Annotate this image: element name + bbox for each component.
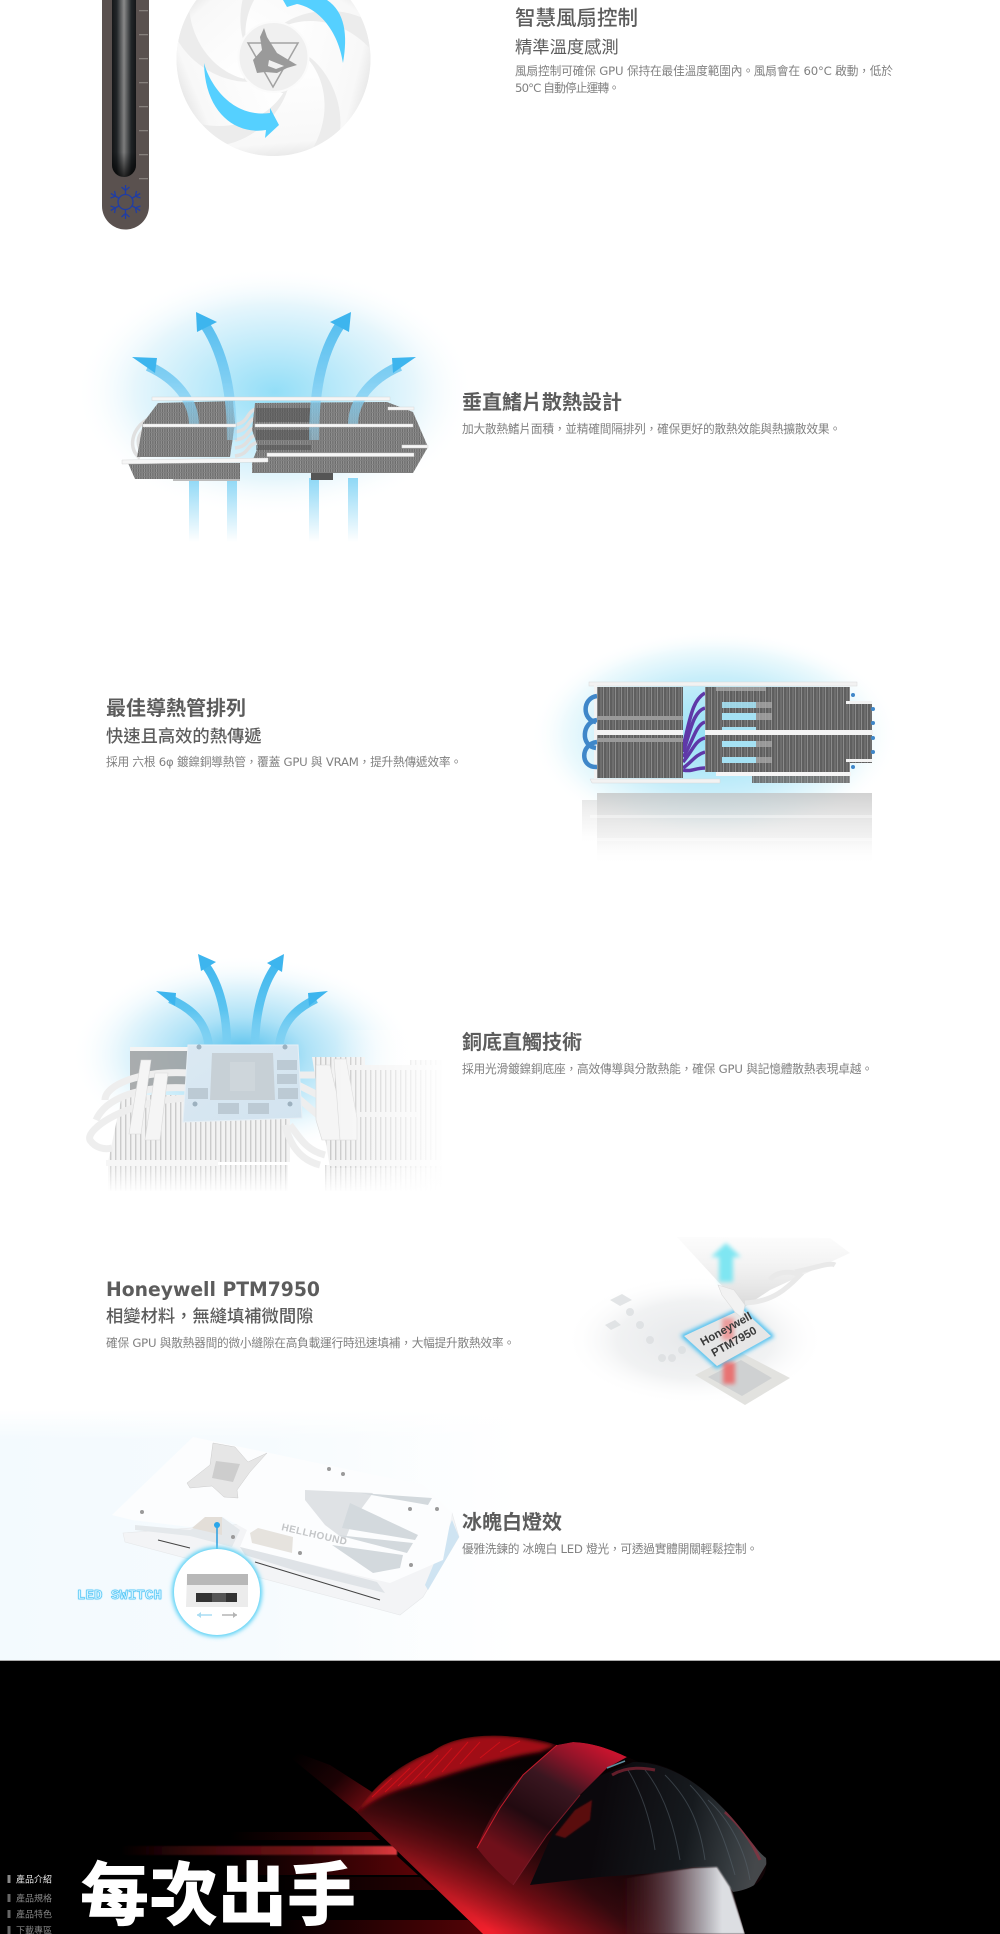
- text block: vertical fin design: [462, 390, 841, 436]
- airflow arrows: [170, 966, 316, 1048]
- arrow: fan rotation lower: [204, 63, 279, 138]
- headband: [477, 1742, 627, 1885]
- text block: heat pipe arrangement: 最佳導熱管排列: [106, 696, 246, 720]
- airflow lower bars: [189, 478, 358, 542]
- arrow heads: [156, 954, 328, 1006]
- copper base plate: [183, 1044, 302, 1122]
- chip label: PTM7950: [710, 1325, 759, 1360]
- magnifier circle: [172, 1547, 262, 1637]
- headline: 每次出手: [80, 1857, 356, 1934]
- white fin stacks: [106, 1047, 460, 1191]
- top darkening: [357, 1736, 681, 1924]
- panel: LED section background: [0, 1410, 520, 1660]
- chip glow: [684, 1309, 771, 1366]
- brand logo: HELLHOUND: [280, 1522, 348, 1548]
- blue pipes: [584, 696, 597, 767]
- panel: vertical fin heatsink: [75, 267, 475, 542]
- cyan glow: [530, 630, 900, 840]
- right fin block: [705, 687, 872, 772]
- panel: black hero banner: [0, 1660, 1000, 1934]
- fan blades: [176, 0, 370, 156]
- side slots: [158, 1540, 380, 1600]
- red lit hair: [357, 1736, 557, 1812]
- heatsink right block: [252, 402, 428, 480]
- arrow heads: [132, 312, 416, 373]
- text block: smart fan control: 智慧風扇控制: [515, 7, 638, 30]
- text block: heat pipe arrangement: 快速且高效的熱傳遞: [106, 726, 262, 746]
- purple pipes: [683, 693, 705, 771]
- red hair strands: [372, 1741, 520, 1797]
- side navigation: 產品特色: [16, 1908, 52, 1920]
- blue hair glint: [607, 1761, 625, 1768]
- icon: snowflake: [109, 185, 142, 219]
- red speed streaks: [121, 1832, 483, 1934]
- text block: vertical fin design: 加大散熱鰭片面積，並精確間隔排列，確保更好的散熱效能與熱擴散效果。: [462, 422, 841, 436]
- side navigation: 產品規格: [16, 1892, 52, 1904]
- brand logo: [280, 1490, 373, 1548]
- text block: Honeywell PTM7950: [106, 1278, 515, 1350]
- text block: Honeywell PTM7950: 相變材料，無縫填補微間隙: [106, 1306, 313, 1326]
- panel: heat pipes top view: [530, 630, 900, 865]
- circuit board: [565, 1275, 825, 1405]
- head silhouette: [340, 1730, 780, 1934]
- red heat beam: [723, 1362, 735, 1384]
- panel: thermal pad illustration: [565, 1237, 850, 1405]
- LED SWITCH label: LED SWITCH: [77, 1588, 162, 1604]
- text block: heat pipe arrangement: [106, 696, 462, 769]
- panel: thermometer: [102, 0, 149, 229]
- red rim highlight: [612, 1768, 760, 1860]
- hair strands: [628, 1770, 750, 1880]
- horizontal bars: [596, 701, 873, 762]
- thermometer tube: [112, 0, 136, 177]
- chip label: Honeywell: [699, 1311, 754, 1349]
- neck: [626, 1866, 745, 1934]
- fan hub with wolf logo: [238, 22, 308, 92]
- thermometer ticks: [139, 11, 148, 179]
- side navigation: [8, 1874, 52, 1934]
- red patch in hair: [555, 1800, 592, 1838]
- heat pipes: [90, 1073, 325, 1165]
- arrow: fan rotation upper: [283, 0, 345, 63]
- vents: [332, 1493, 432, 1573]
- frame rails: [122, 397, 428, 464]
- side navigation: 產品介紹: [16, 1874, 52, 1886]
- text block: ice white lighting: [462, 1511, 758, 1556]
- text block: smart fan control: 風扇控制可確保 GPU 保持在最佳溫度範圍內。風扇會在 60°C 啟動，低於: [515, 64, 893, 78]
- lower fin strip: [752, 776, 850, 783]
- bottom fade: [90, 1165, 462, 1193]
- text block: smart fan control: [515, 7, 893, 95]
- backplate: [112, 1437, 452, 1583]
- dark hair: [530, 1762, 770, 1892]
- red diagonal beam tip: [274, 1744, 372, 1812]
- text block: Honeywell PTM7950: 確保 GPU 與散熱器間的微小縫隙在高負載運行時迅速填補，大幅提升散熱效率。: [106, 1336, 515, 1350]
- panel: fan: [176, 0, 370, 156]
- connector line: [214, 1522, 220, 1550]
- left fin block: [597, 687, 683, 778]
- LED SWITCH label: LED SWITCH: [77, 1588, 162, 1604]
- frame: [589, 682, 857, 783]
- heat pipes: [745, 1264, 835, 1303]
- blue pipe ends: [851, 693, 875, 769]
- heatsink left block: [128, 401, 240, 481]
- text block: Honeywell PTM7950: Honeywell PTM7950: [106, 1278, 320, 1301]
- text block: ice white lighting: 優雅洗鍊的 冰魄白 LED 燈光，可透過實體開關輕鬆控制。: [462, 1542, 758, 1556]
- connector cutouts: [192, 1517, 293, 1553]
- airflow arrows: [148, 325, 400, 440]
- text block: ice white lighting: 冰魄白燈效: [462, 1511, 562, 1534]
- panel: white card backplate: [77, 1437, 459, 1637]
- right fade: [335, 1030, 462, 1200]
- text block: copper base: 銅底直觸技術: [462, 1030, 582, 1054]
- screws: [140, 1467, 439, 1567]
- text block: copper base: [462, 1030, 873, 1076]
- text block: copper base: 採用光滑鍍鎳銅底座，高效傳導與分散熱能，確保 GPU 與記憶體散熱表現卓越。: [462, 1062, 873, 1076]
- heat pipes: [133, 408, 258, 458]
- chip label: [684, 1309, 771, 1366]
- cooler: [677, 1237, 850, 1310]
- text block: heat pipe arrangement: 採用 六根 6φ 鍍鎳銅導熱管，覆蓋 GPU 與 VRAM，提升熱傳遞效率。: [106, 755, 462, 769]
- blue glow: [71, 955, 415, 1155]
- cooler corner bracket: [718, 1285, 745, 1318]
- text block: vertical fin design: 垂直鰭片散熱設計: [462, 390, 622, 414]
- clamp bars: [129, 1059, 357, 1140]
- blue side light: [425, 1520, 459, 1590]
- up arrow: [711, 1243, 741, 1282]
- reflection: [582, 793, 875, 865]
- LED switch icon: [186, 1574, 248, 1618]
- card lower shroud: [123, 1513, 459, 1615]
- text block: smart fan control: 50°C 自動停止運轉。: [515, 81, 620, 95]
- GPU bracket: [187, 1443, 267, 1498]
- blue glow: [75, 267, 475, 517]
- panel: copper base contact: [71, 954, 462, 1200]
- text block: smart fan control: 精準溫度感測: [515, 37, 619, 57]
